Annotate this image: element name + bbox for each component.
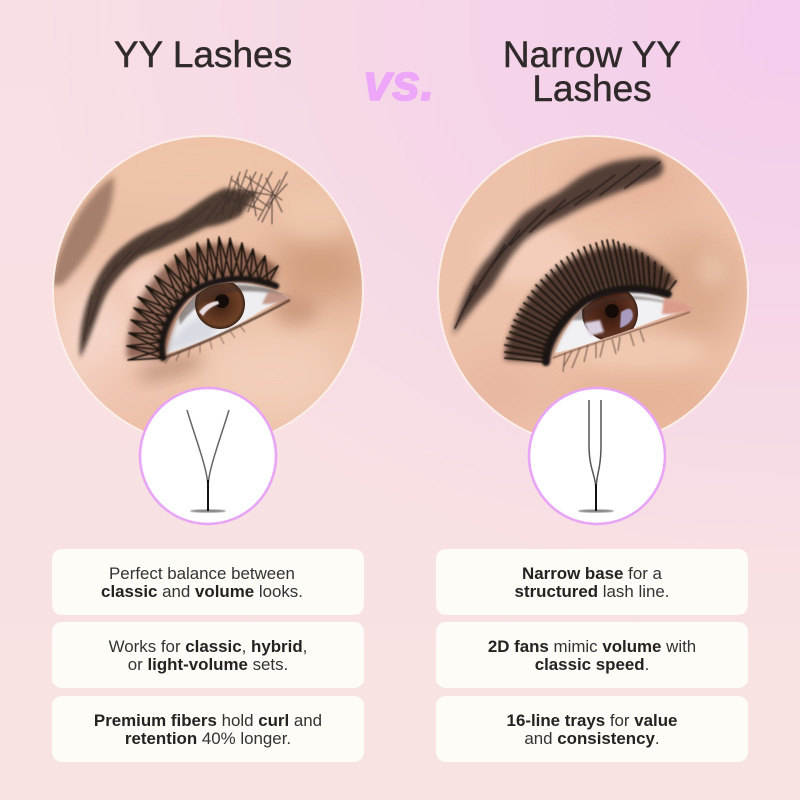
icon: Narrow YY lash	[529, 388, 665, 524]
photo: YY lashes eye	[52, 135, 364, 432]
card: narrow base: Narrow base for a	[522, 564, 662, 582]
heading: YY Lashes: YY Lashes	[114, 34, 292, 75]
card: narrow base: structured lash line.	[515, 582, 669, 600]
card: premium fibers	[52, 696, 364, 762]
illustration: both eye photos and lash icons	[52, 135, 749, 526]
card: 2D fans: 2D fans mimic volume with	[488, 636, 696, 656]
lower lash line	[553, 312, 690, 358]
card: 16-line trays: and consistency.	[524, 728, 660, 748]
photo: Narrow YY lashes eye	[435, 133, 751, 449]
vs. label: vs.	[364, 54, 434, 111]
eyebrow	[453, 157, 663, 335]
sclera	[166, 283, 291, 354]
card: 16-line trays: 16-line trays for value	[507, 710, 677, 730]
upper lash fan	[505, 240, 676, 362]
upper lash fan	[127, 237, 278, 360]
card: narrow base	[436, 549, 748, 615]
card: 16-line trays	[436, 696, 748, 762]
lower lash line	[164, 300, 290, 358]
sclera	[555, 290, 693, 353]
card: works for: Works for classic, hybrid,	[109, 636, 307, 656]
card: works for	[52, 622, 364, 688]
card: balance: classic and volume looks.	[101, 582, 303, 600]
iris	[168, 279, 285, 352]
card: 2D fans	[436, 622, 748, 688]
card: balance	[52, 549, 364, 615]
icon: YY lash	[140, 388, 276, 524]
heading: Narrow YY Lashes	[503, 34, 681, 109]
eyebrow	[80, 170, 287, 358]
heading: Narrow YY Lashes: Lashes	[532, 68, 652, 109]
card: works for: or light-volume sets.	[128, 654, 288, 674]
iris	[572, 291, 692, 340]
card: 2D fans: classic speed.	[535, 654, 649, 674]
card: premium fibers: retention 40% longer.	[125, 728, 291, 748]
card: premium fibers: Premium fibers hold curl and	[94, 710, 322, 730]
heading: Narrow YY Lashes: Narrow YY	[503, 34, 681, 75]
hair strand at left edge	[50, 176, 114, 285]
eye outer corner	[262, 292, 292, 304]
eye outer corner	[662, 298, 694, 314]
card: balance: Perfect balance between	[109, 564, 295, 582]
